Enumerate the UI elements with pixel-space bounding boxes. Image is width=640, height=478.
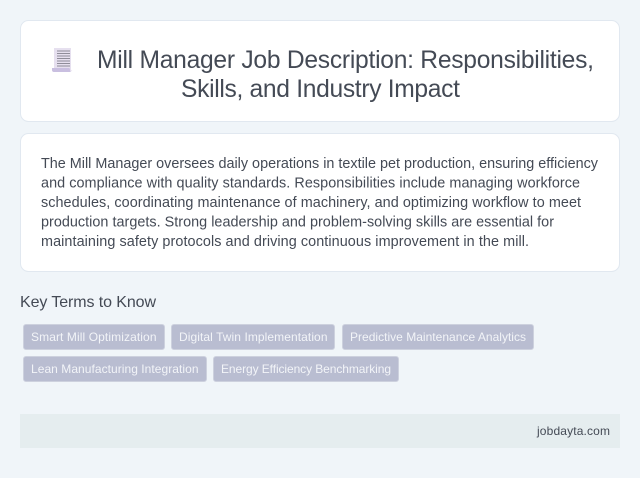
description text: and compliance with quality standards. Responsibilities include managing workforce xyxy=(41,176,580,192)
description text: maintaining safety protocols and driving continuous improvement in the mill. xyxy=(41,234,529,250)
title: Skills, and Industry Impact xyxy=(181,76,460,103)
tag: lean manufacturing integration: Lean Manufacturing Integration xyxy=(31,362,198,376)
heading: key terms: Key Terms to Know xyxy=(20,294,156,311)
footer source text: jobdayta.com xyxy=(536,424,610,438)
footer bar xyxy=(20,414,620,448)
tag: predictive maintenance analytics xyxy=(342,324,534,350)
panel: header card xyxy=(20,20,620,122)
tag: predictive maintenance analytics: Predictive Maintenance Analytics xyxy=(350,330,526,344)
tag: smart mill optimization: Smart Mill Optimization xyxy=(31,330,156,344)
tag: energy efficiency benchmarking: Energy Efficiency Benchmarking xyxy=(221,362,391,376)
tag: lean manufacturing integration xyxy=(24,356,206,382)
icon: document scroll xyxy=(52,48,73,72)
tag: energy efficiency benchmarking xyxy=(214,356,398,382)
description text: The Mill Manager oversees daily operations in textile pet production, ensuring efficiency xyxy=(41,156,599,172)
tag: digital twin implementation xyxy=(172,324,334,350)
tag: smart mill optimization xyxy=(24,324,164,350)
tag: digital twin implementation: Digital Twin Implementation xyxy=(179,330,328,344)
title: Mill Manager Job Description: Responsibilities, xyxy=(97,47,594,74)
description text: production targets. Strong leadership and problem-solving skills are essential for xyxy=(41,214,554,230)
title xyxy=(97,47,594,103)
panel: description card xyxy=(20,134,620,272)
description text xyxy=(41,156,599,250)
description text: schedules, coordinating maintenance of machinery, and optimizing workflow to meet xyxy=(41,195,581,211)
